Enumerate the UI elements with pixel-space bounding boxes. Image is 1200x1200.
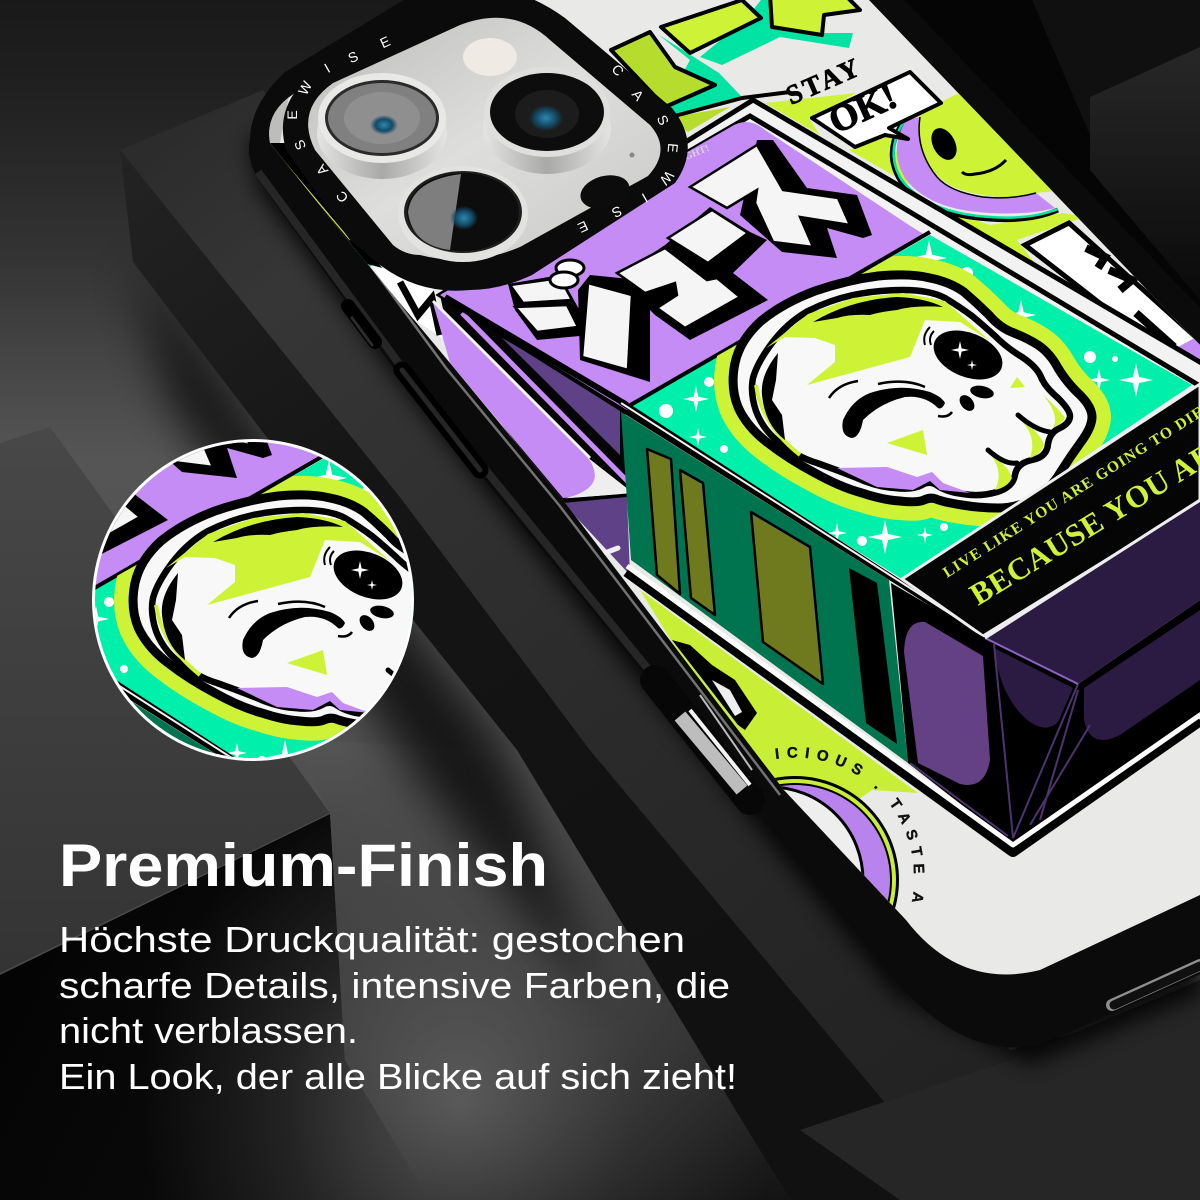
CASEWISE ring text: W	[656, 168, 677, 189]
lens: lower	[398, 166, 528, 262]
eye	[926, 321, 1010, 389]
right lettering	[1020, 220, 1200, 360]
CASEWISE ring text: E	[377, 33, 393, 51]
left edge lettering	[264, 90, 445, 340]
CASEWISE ring text: C	[609, 61, 627, 79]
jaw lobes	[988, 395, 1065, 490]
box top white base	[440, 100, 1200, 636]
CASEWISE ring text: I	[321, 60, 333, 76]
CASEWISE ring text: A	[312, 161, 331, 179]
speech bubble: STAY OK!	[781, 51, 941, 147]
round sticker with curved text: ICIOUS . TASTE A	[775, 746, 924, 902]
mouth	[842, 388, 945, 438]
CASEWISE ring text: A	[629, 86, 648, 104]
CASEWISE ring text: S	[609, 203, 625, 221]
CASEWISE ring text: E	[665, 143, 681, 153]
CASEWISE ring text: S	[654, 112, 672, 128]
lens: upper right	[483, 67, 611, 174]
lime triangles	[887, 430, 927, 455]
lime strip below the box	[640, 590, 918, 840]
speech bubble: STAY OK!: OK!	[823, 76, 903, 142]
body text: nicht verblassen.	[59, 1010, 358, 1051]
lime left rim	[756, 385, 800, 455]
faint top text: GHT!	[683, 143, 711, 163]
body text: Höchste Druckqualität: gestochen	[59, 919, 685, 960]
printed phone back artwork	[269, 0, 1200, 974]
camera island	[283, 0, 688, 291]
purple jaw shade	[837, 467, 970, 493]
CASEWISE ring text: E	[575, 218, 591, 236]
phone shadow	[248, 120, 1200, 1065]
silver action button	[655, 680, 752, 800]
lime and teal letters at top	[611, 0, 860, 132]
phone case body	[249, 0, 1200, 1048]
body text: Ein Look, der alle Blicke auf sich zieht!	[59, 1056, 737, 1097]
inner frame line	[640, 116, 1200, 386]
box artwork: purple top, teal panel, skull, green side	[440, 100, 1200, 763]
box label: black band with slogan	[902, 384, 1200, 636]
box bottom white line	[627, 566, 1200, 845]
CASEWISE ring text: I	[639, 190, 651, 206]
small dots on letters	[550, 260, 584, 288]
heading: Premium-Finish	[59, 832, 548, 899]
nose	[969, 384, 995, 400]
lens: upper left	[317, 73, 447, 179]
block letters	[508, 140, 872, 382]
speech bubble: STAY OK!: STAY	[781, 51, 866, 111]
skull	[733, 275, 1092, 508]
camera glass	[308, 18, 661, 260]
box top edge line	[445, 297, 627, 405]
side buttons	[348, 306, 480, 470]
purple top panel	[440, 122, 925, 410]
CASEWISE ring text: C	[333, 188, 351, 206]
circular detail zoom of the skull	[92, 439, 414, 761]
box purple ends	[891, 500, 1200, 845]
stars and dots	[659, 240, 1153, 554]
sensor dot	[577, 170, 633, 214]
CASEWISE ring text: S	[345, 48, 361, 66]
black drip shapes	[672, 640, 757, 730]
CASEWISE ring text: S	[291, 137, 309, 153]
body text: scharfe Details, intensive Farben, die	[59, 965, 730, 1006]
green box side	[621, 412, 908, 763]
flash	[463, 38, 517, 76]
silver edge gloss	[368, 262, 780, 795]
CASEWISE ring text: E	[284, 110, 300, 120]
box left flaps	[433, 295, 638, 575]
CASEWISE ring text	[284, 33, 681, 236]
box bottom outline	[627, 571, 1200, 851]
body text	[59, 919, 737, 1097]
teal panel	[627, 235, 1192, 579]
CASEWISE ring text: W	[295, 78, 316, 98]
charging port	[1112, 965, 1200, 1005]
lime forehead	[766, 293, 990, 385]
smiley sticker	[765, 90, 1085, 270]
hair	[813, 297, 943, 322]
